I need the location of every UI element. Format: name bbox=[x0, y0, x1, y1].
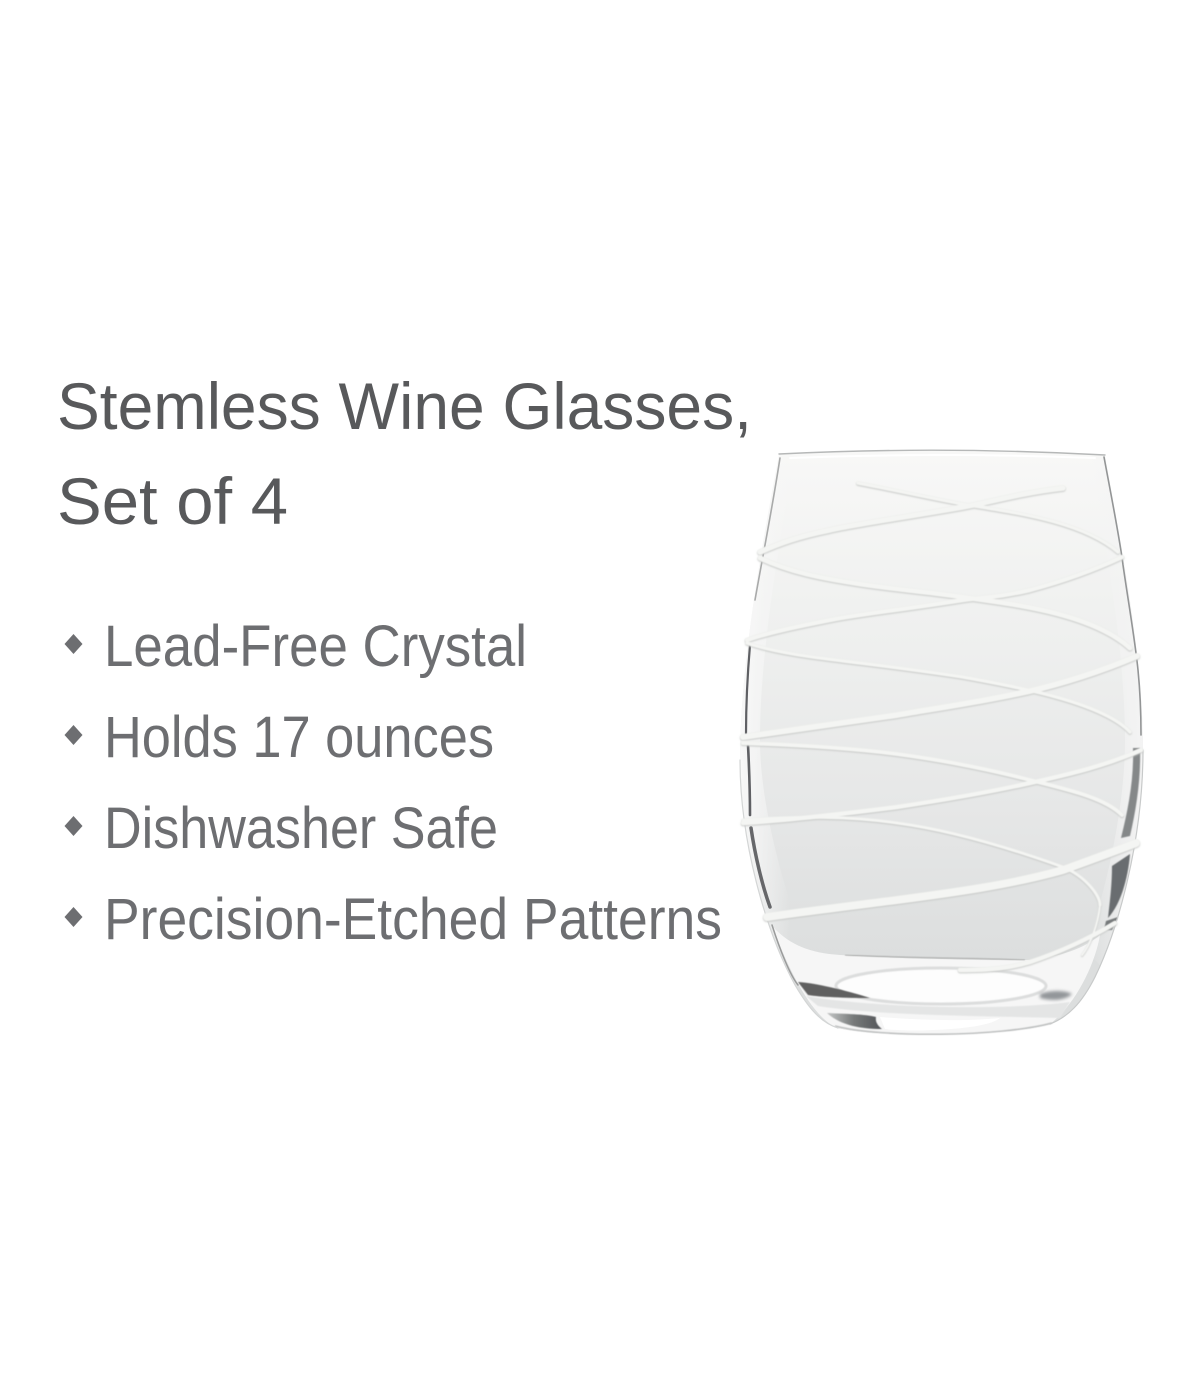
inner bottom line bbox=[845, 955, 1025, 960]
bullet: Lead-Free Crystal: Lead-Free Crystal bbox=[104, 614, 527, 679]
bullet: Dishwasher Safe: Dishwasher Safe bbox=[104, 796, 498, 861]
dark reflection bottom-left bbox=[827, 1013, 882, 1029]
stemless wine glass illustration bbox=[740, 450, 1143, 1034]
etched spiral bands bbox=[743, 483, 1141, 970]
bullet: Precision-Etched Patterns: Precision-Etched Patterns bbox=[104, 887, 722, 952]
foot band bbox=[806, 996, 1070, 1018]
heading bbox=[57, 369, 752, 538]
feature list bbox=[64, 614, 722, 952]
dark reflection right bbox=[1040, 991, 1072, 1000]
base of glass bbox=[773, 927, 1100, 1034]
dark left edge reflections bbox=[740, 450, 1143, 1028]
base ellipse bbox=[836, 968, 1046, 1004]
heading: Set of 4 bbox=[57, 464, 288, 538]
dark reflection left bbox=[798, 982, 870, 998]
edge shading bbox=[740, 454, 810, 975]
heading: Stemless Wine Glasses, bbox=[57, 369, 752, 443]
bullet: Holds 17 ounces: Holds 17 ounces bbox=[104, 705, 494, 770]
glass body bbox=[740, 451, 1143, 1034]
bottom highlight bbox=[880, 1017, 1000, 1030]
bottom edge bbox=[835, 1023, 1052, 1034]
dark right reflections bbox=[1104, 748, 1140, 930]
